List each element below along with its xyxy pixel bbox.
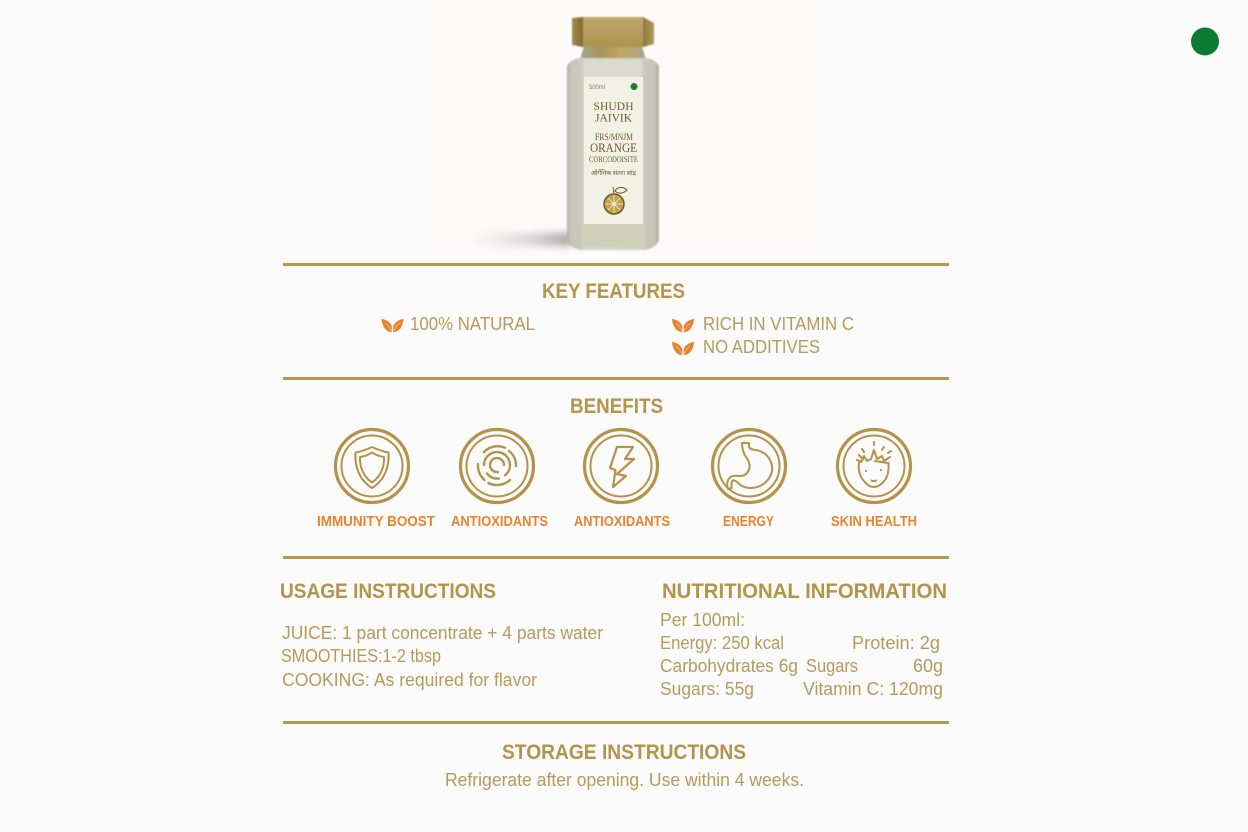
volume text: 500ml: [589, 85, 605, 91]
section: key features: [382, 280, 854, 357]
nutrition table: Per 100ml:: [660, 609, 745, 630]
product image backdrop: [431, 0, 815, 255]
section: storage instructions: [445, 741, 804, 790]
section: benefits: [317, 395, 917, 530]
usage list: JUICE: 1 part concentrate + 4 parts water: [282, 622, 603, 643]
usage list: COOKING: As required for flavor: [282, 669, 537, 690]
icon: shield: [336, 430, 408, 502]
label: ANTIOXIDANTS: [574, 514, 670, 530]
section: usage instructions: [280, 580, 603, 690]
nutrition table: Energy: 250 kcal: [660, 632, 784, 653]
label: ENERGY: [723, 514, 774, 530]
icon: spiral: [460, 430, 534, 502]
label: SKIN HEALTH: [831, 514, 917, 530]
product name: FRS/MNJM: [595, 133, 633, 143]
heading: KEY FEATURES: [542, 280, 685, 303]
label: ANTIOXIDANTS: [451, 514, 548, 530]
green dot on label: [630, 83, 638, 90]
bottle label: ऑर्गेनिक संतरा सांद्र: [591, 169, 637, 177]
nutrition table: 60g: [913, 655, 943, 676]
nutrition table: Carbohydrates 6g: [660, 655, 798, 676]
bottle label: CORCODOISITE: [589, 154, 638, 164]
feature: no additives: NO ADDITIVES: [703, 336, 820, 357]
usage list: SMOOTHIES:1-2 tbsp: [281, 645, 441, 666]
icon: lightning bolt: [584, 430, 658, 502]
nutrition table: Vitamin C: 120mg: [803, 678, 943, 699]
bottle label: [584, 77, 643, 224]
label: IMMUNITY BOOST: [317, 514, 435, 530]
heading: NUTRITIONAL INFORMATION: [662, 580, 947, 603]
bottle label: JAIVIK: [595, 112, 633, 124]
bottle shoulder highlight: [584, 60, 642, 77]
feature: rich in vitamin c: RICH IN VITAMIN C: [703, 313, 854, 334]
storage note: Refrigerate after opening. Use within 4 weeks.: [445, 769, 804, 790]
brand name: SHUDH: [594, 101, 634, 113]
usage list: [281, 622, 603, 690]
product bottle: [468, 17, 659, 250]
bottle cap: [572, 17, 654, 47]
nutrition table: Sugars: [806, 655, 858, 676]
icon: stomach: [712, 430, 786, 502]
heading: STORAGE INSTRUCTIONS: [502, 741, 746, 764]
divider 4: [283, 721, 949, 724]
nutrition table: [660, 609, 943, 699]
icon: face: [838, 430, 910, 502]
nutrition table: Sugars: 55g: [660, 678, 754, 699]
divider 1: [283, 263, 949, 266]
orange icon: [604, 187, 627, 214]
divider 2: [283, 377, 949, 380]
bottle label: ORANGE: [590, 141, 637, 155]
feature: 100% natural: 100% NATURAL: [410, 313, 535, 334]
nutrition table: Protein: 2g: [852, 632, 940, 653]
heading: BENEFITS: [570, 395, 663, 418]
heading: USAGE INSTRUCTIONS: [280, 580, 496, 603]
bottle shadow: [468, 233, 572, 246]
bottle neck: [580, 46, 646, 60]
section: nutritional information: [660, 580, 947, 699]
bottle lower panel: [584, 224, 642, 247]
divider 3: [283, 556, 949, 559]
bottle body: [567, 58, 659, 250]
status green dot: [1191, 28, 1219, 56]
